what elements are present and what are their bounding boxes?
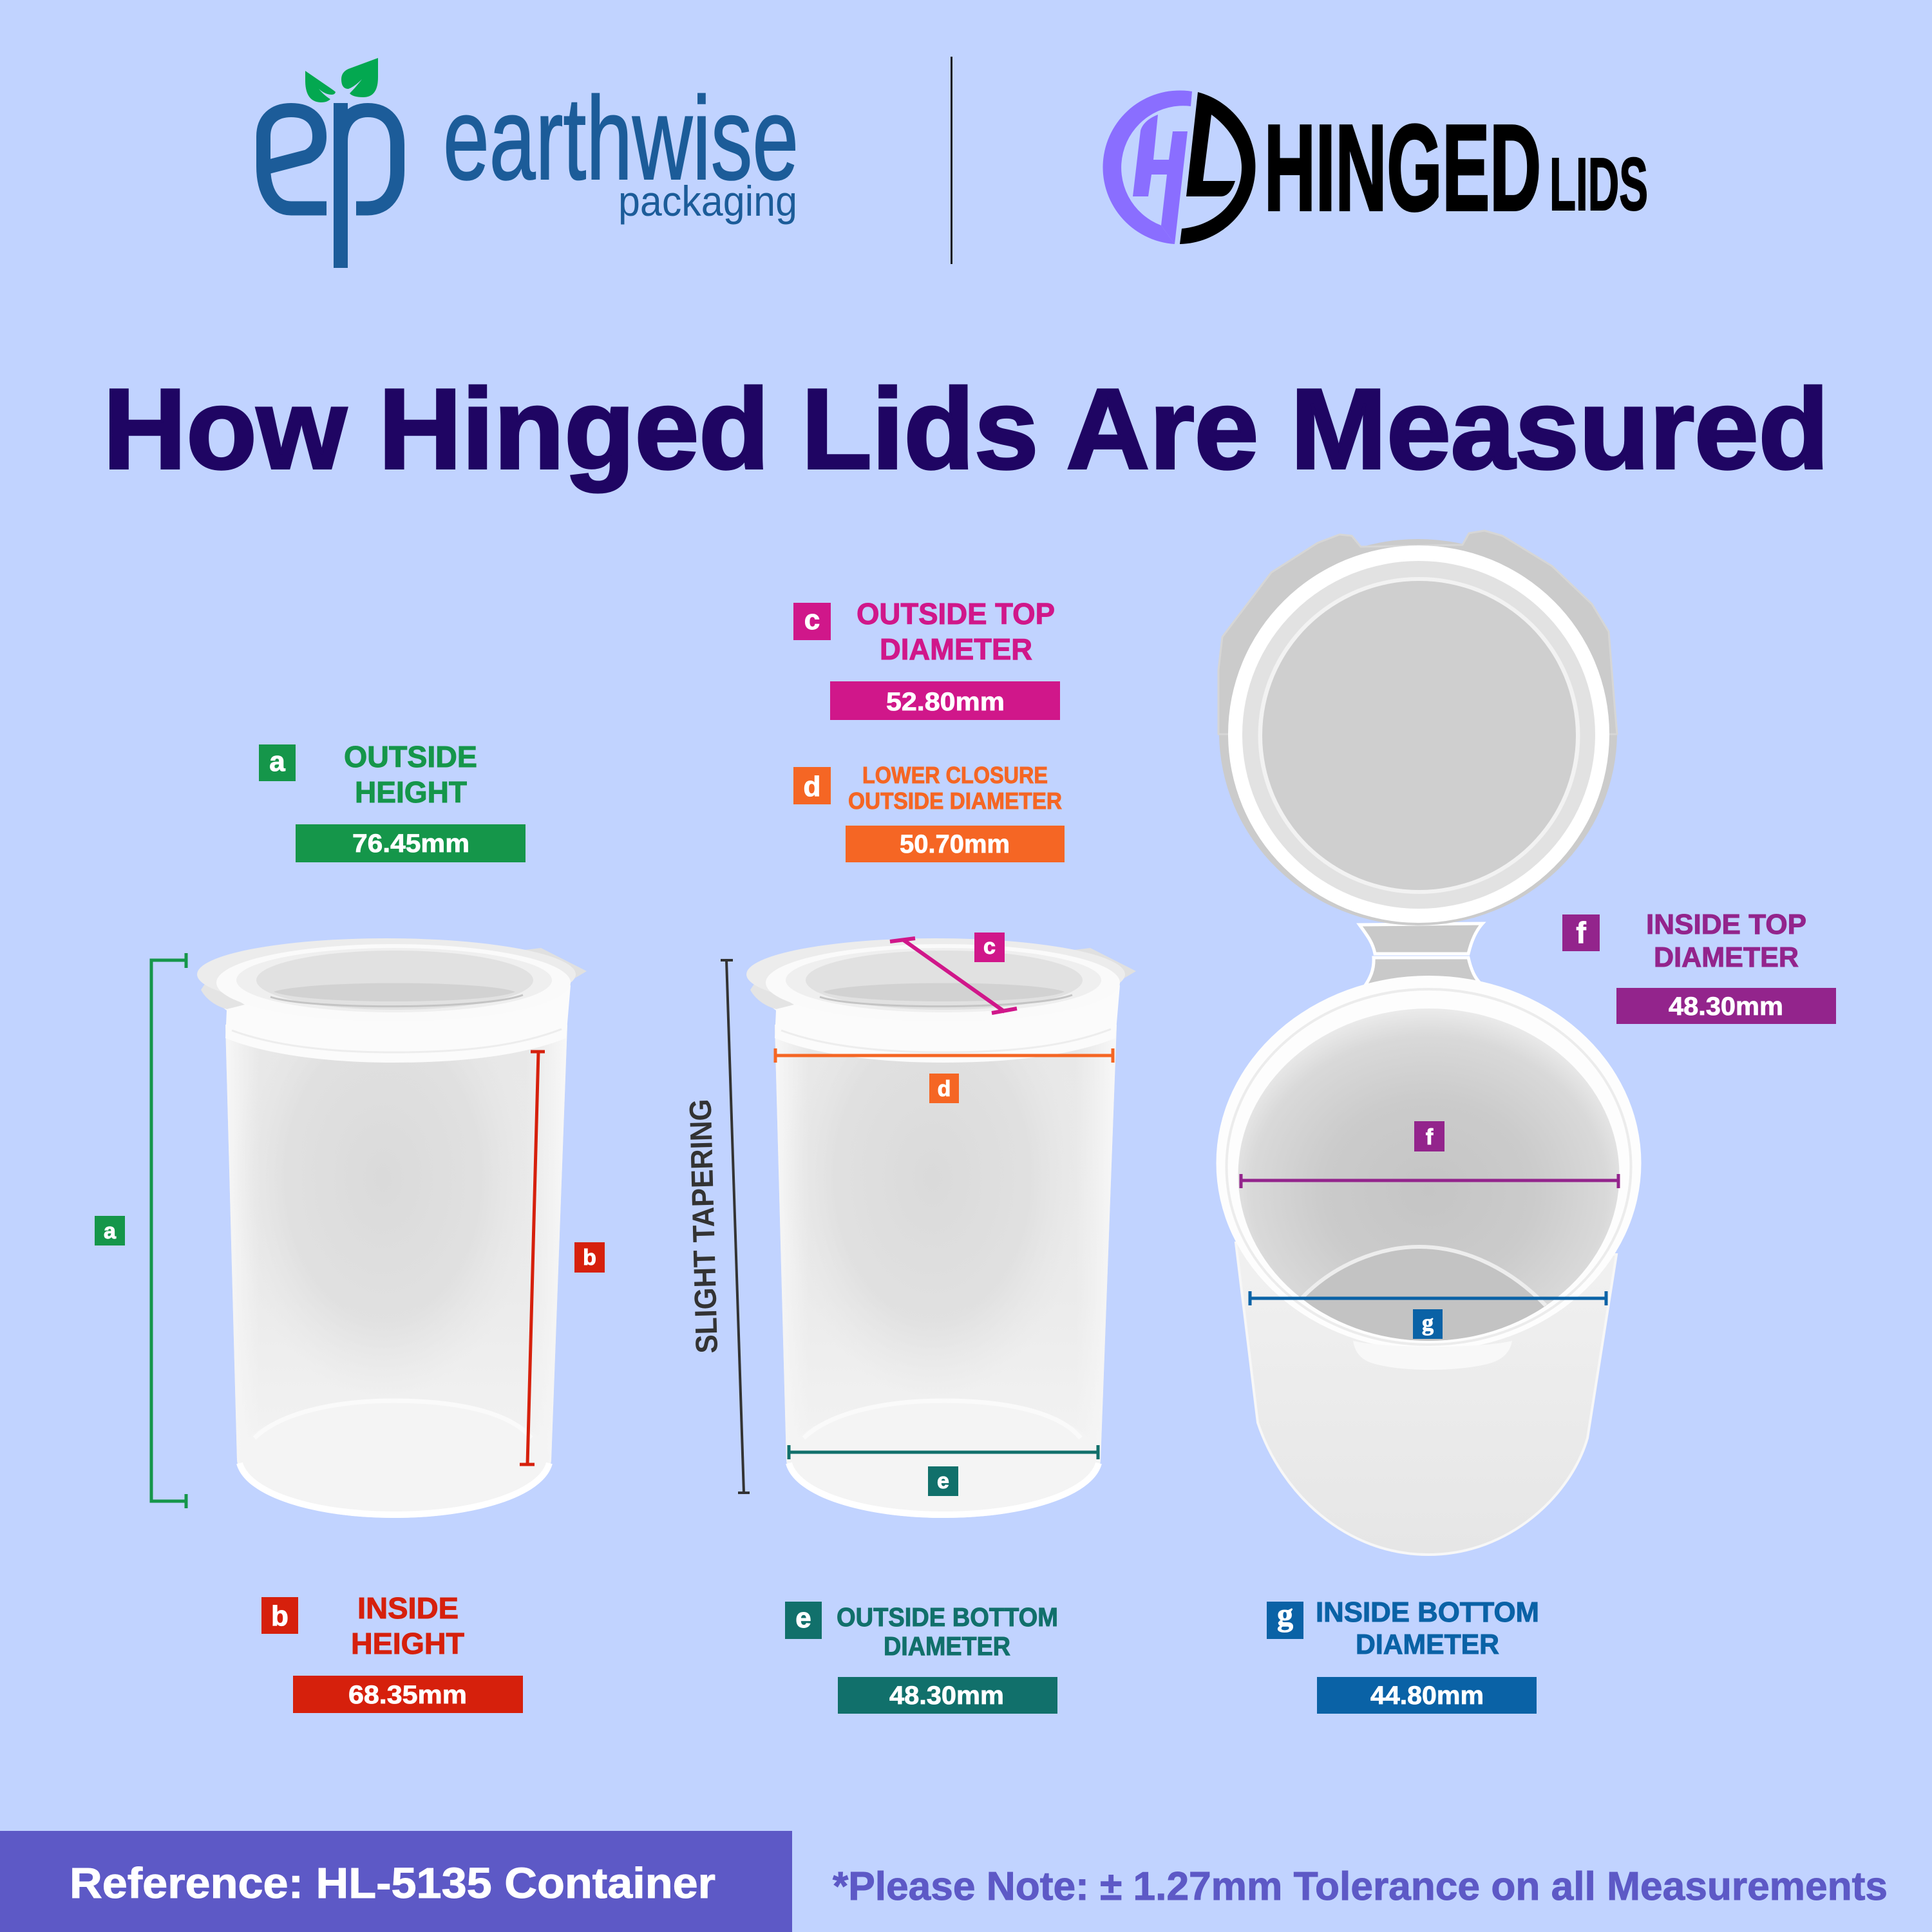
dimension b line (520, 1052, 545, 1464)
footer tolerance note: *Please Note: ± 1.27mm Tolerance on all Measurements (833, 1864, 1888, 1909)
footer reference bar (0, 1831, 792, 1932)
wordmark: earthwise: earthwise (443, 72, 799, 204)
icon: green leaves (305, 58, 378, 102)
panel: open container, inside diameters (1216, 531, 1641, 1555)
hinge (1359, 923, 1482, 985)
legend: d lower closure outside diameter: LOWER CLOSURE (862, 762, 1048, 788)
badge c: c (983, 934, 996, 959)
legend: d lower closure outside diameter (793, 762, 1065, 862)
legend: f inside top diameter: INSIDE TOP (1646, 909, 1806, 940)
legend: b inside height (261, 1591, 523, 1713)
badge b (574, 1242, 605, 1273)
badge g: g (1422, 1310, 1434, 1336)
panel: cup c/d/e, diameters (684, 933, 1136, 1518)
logo: earthwise packaging (263, 58, 799, 268)
icon: HL circle black half (1180, 92, 1255, 244)
badge a: a (104, 1219, 117, 1244)
legend: g inside bottom diameter (1267, 1596, 1539, 1714)
badge e (928, 1466, 958, 1496)
legend: c outside top diameter: c (804, 604, 820, 636)
taper line (721, 960, 750, 1493)
badge d: d (938, 1077, 951, 1101)
legend: b inside height: HEIGHT (351, 1627, 464, 1660)
icon: ep monogram (263, 103, 397, 268)
legend: d lower closure outside diameter: 50.70mm (900, 830, 1010, 858)
legend: e outside bottom diameter: DIAMETER (884, 1631, 1010, 1661)
wordmark: hinged: HINGED (1264, 100, 1541, 236)
dimension f line (1241, 1174, 1618, 1188)
open container interior (1238, 1009, 1619, 1352)
legend: a outside height: HEIGHT (355, 775, 467, 809)
legend: f inside top diameter: DIAMETER (1654, 942, 1799, 973)
badge d (929, 1074, 959, 1103)
legend: b inside height: 68.35mm (348, 1681, 467, 1709)
container illustration middle (746, 938, 1136, 1518)
legend: e outside bottom diameter (785, 1602, 1058, 1714)
slight tapering label: SLIGHT TAPERING (684, 1099, 724, 1354)
legend: f inside top diameter: 48.30mm (1669, 992, 1783, 1021)
legend: c outside top diameter: DIAMETER (880, 632, 1032, 666)
wordmark: lids: LIDS (1549, 142, 1648, 226)
legend: c outside top diameter (793, 597, 1060, 720)
legend: e outside bottom diameter: 48.30mm (889, 1681, 1004, 1710)
panel: cup a/b, heights (95, 938, 605, 1518)
badge b: b (583, 1245, 596, 1270)
dimension d line (775, 1048, 1113, 1063)
legend: b inside height: b (271, 1600, 289, 1632)
badge f: f (1426, 1125, 1434, 1150)
dimension a bracket (151, 953, 186, 1508)
legend: f inside top diameter (1562, 909, 1836, 1024)
open container rim (1216, 976, 1641, 1350)
legend: g inside bottom diameter: g (1277, 1596, 1293, 1633)
wordmark: packaging: packaging (618, 177, 797, 225)
legend: a outside height: a (269, 746, 285, 777)
legend: g inside bottom diameter: DIAMETER (1356, 1629, 1499, 1660)
legend: a outside height: OUTSIDE (344, 740, 477, 773)
legend: a outside height (259, 740, 526, 862)
dimension c line (890, 938, 1017, 1013)
badge c (974, 933, 1005, 962)
badge f (1414, 1121, 1444, 1151)
open container body (1236, 1243, 1616, 1555)
legend: e outside bottom diameter: e (795, 1602, 811, 1634)
container illustration left (197, 938, 587, 1518)
legend: c outside top diameter: OUTSIDE TOP (857, 597, 1055, 630)
title: How Hinged Lids Are Measured (103, 365, 1829, 493)
badge g (1413, 1309, 1443, 1339)
badge a (95, 1216, 125, 1245)
logo divider (951, 57, 952, 264)
badge e: e (937, 1469, 949, 1493)
legend: c outside top diameter: 52.80mm (886, 688, 1005, 716)
container tab (1353, 1341, 1512, 1370)
legend: g inside bottom diameter: 44.80mm (1370, 1681, 1484, 1710)
icon: HL circle purple half (1103, 90, 1192, 244)
legend: d lower closure outside diameter: d (804, 771, 820, 802)
footer reference bar: Reference: HL-5135 Container (70, 1859, 715, 1908)
legend: b inside height: INSIDE (357, 1591, 459, 1625)
legend: e outside bottom diameter: OUTSIDE BOTTOM (837, 1602, 1058, 1632)
lid (1218, 531, 1617, 925)
logo: hinged lids (1103, 90, 1648, 244)
legend: f inside top diameter: f (1576, 916, 1586, 949)
legend: d lower closure outside diameter: OUTSIDE DIAMETER (848, 788, 1062, 814)
dimension g line (1250, 1291, 1606, 1305)
legend: g inside bottom diameter: INSIDE BOTTOM (1316, 1596, 1539, 1628)
legend: a outside height: 76.45mm (352, 829, 469, 858)
dimension e line (789, 1445, 1098, 1459)
